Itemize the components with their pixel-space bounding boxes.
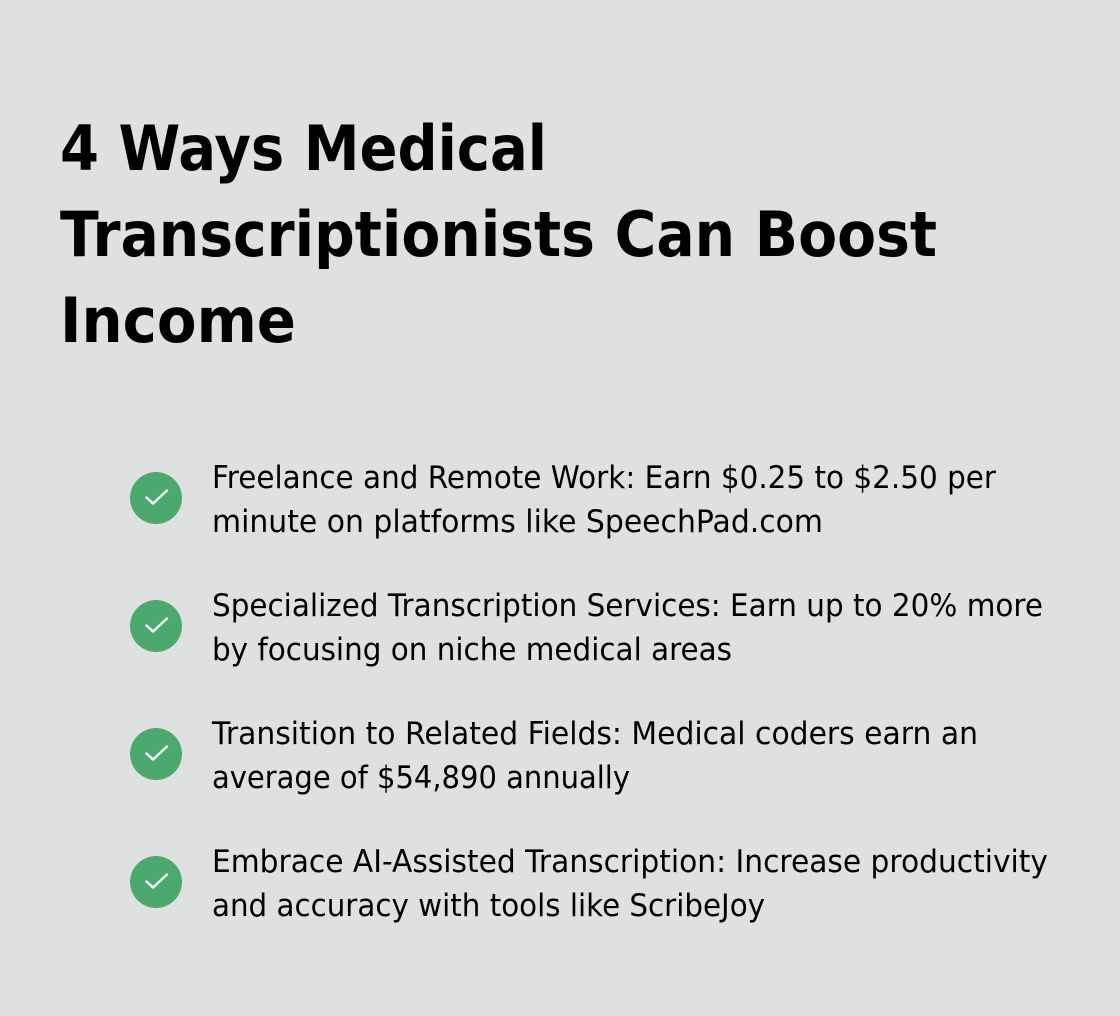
icon: green check circle bbox=[130, 472, 182, 524]
title: Income bbox=[60, 284, 296, 357]
list item: embrace AI-assisted transcription bbox=[130, 844, 1048, 924]
text: freelance and remote work bbox=[212, 460, 996, 540]
text: specialized transcription services: Specialized Transcription Services: Earn up to 20% more bbox=[212, 588, 1043, 624]
text: specialized transcription services bbox=[212, 588, 1043, 668]
text: transition to related fields: average of $54,890 annually bbox=[212, 760, 630, 796]
list item: freelance and remote work bbox=[130, 460, 996, 540]
text: transition to related fields: Transition to Related Fields: Medical coders earn an bbox=[211, 716, 978, 752]
text: freelance and remote work: Freelance and Remote Work: Earn $0.25 to $2.50 per bbox=[212, 460, 996, 496]
list item: transition to related fields bbox=[130, 716, 978, 796]
text: embrace AI-assisted transcription: Embrace AI-Assisted Transcription: Increase productivity bbox=[212, 844, 1048, 880]
title: 4 Ways Medical bbox=[60, 112, 547, 185]
text: embrace AI-assisted transcription bbox=[212, 844, 1048, 924]
text: embrace AI-assisted transcription: and accuracy with tools like ScribeJoy bbox=[212, 888, 765, 924]
text: transition to related fields bbox=[211, 716, 978, 796]
icon: green check circle bbox=[130, 600, 182, 652]
text: freelance and remote work: minute on platforms like SpeechPad.com bbox=[212, 504, 823, 540]
icon: green check circle bbox=[130, 856, 182, 908]
list item: specialized transcription services bbox=[130, 588, 1043, 668]
text: specialized transcription services: by focusing on niche medical areas bbox=[212, 632, 732, 668]
icon: green check circle bbox=[130, 728, 182, 780]
title: Transcriptionists Can Boost bbox=[60, 198, 937, 271]
title bbox=[60, 112, 937, 357]
